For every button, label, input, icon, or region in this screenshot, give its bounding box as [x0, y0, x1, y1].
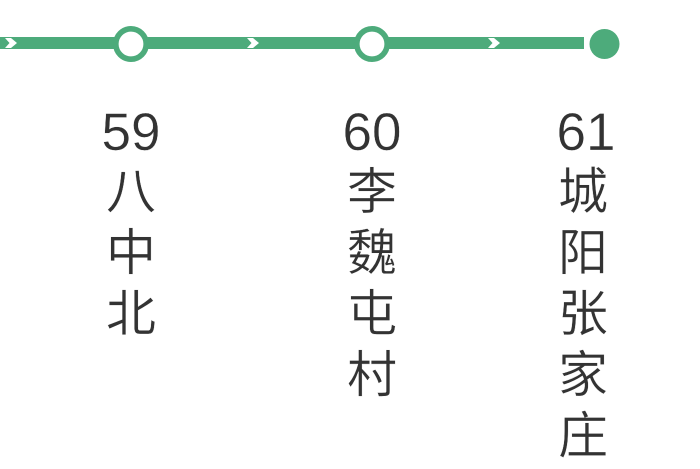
station label: 61 城阳张家庄: 城 [558, 164, 608, 220]
station label: 59 八中北: 59 [102, 103, 160, 162]
station label: 60 李魏屯村: 村 [347, 347, 397, 403]
station label: 61 城阳张家庄: 庄 [558, 408, 608, 464]
station label: 59 八中北: 中 [106, 225, 156, 281]
station label: 60 李魏屯村: 魏 [347, 225, 397, 281]
station label: 61 城阳张家庄: 家 [558, 347, 608, 403]
station marker 59 [116, 29, 146, 59]
arrow: direction chevron 2 [247, 38, 259, 48]
station label: 60 李魏屯村: 屯 [347, 286, 397, 342]
station label: 59 八中北: 八 [106, 164, 156, 220]
station label: 59 八中北 [102, 103, 160, 342]
station label: 60 李魏屯村: 李 [347, 164, 397, 220]
station label: 61 城阳张家庄 [557, 103, 615, 464]
station label: 60 李魏屯村 [343, 103, 401, 403]
station label: 61 城阳张家庄: 61 [557, 103, 615, 162]
station label: 60 李魏屯村: 60 [343, 103, 401, 162]
station label: 59 八中北: 北 [106, 286, 156, 342]
station label: 61 城阳张家庄: 张 [558, 286, 608, 342]
arrow: direction chevron 1 [5, 38, 17, 48]
route line [0, 37, 584, 49]
station label: 61 城阳张家庄: 阳 [558, 225, 608, 281]
terminal station marker 61 [590, 29, 620, 59]
station marker 60 [357, 29, 387, 59]
arrow: direction chevron 3 [488, 38, 500, 48]
